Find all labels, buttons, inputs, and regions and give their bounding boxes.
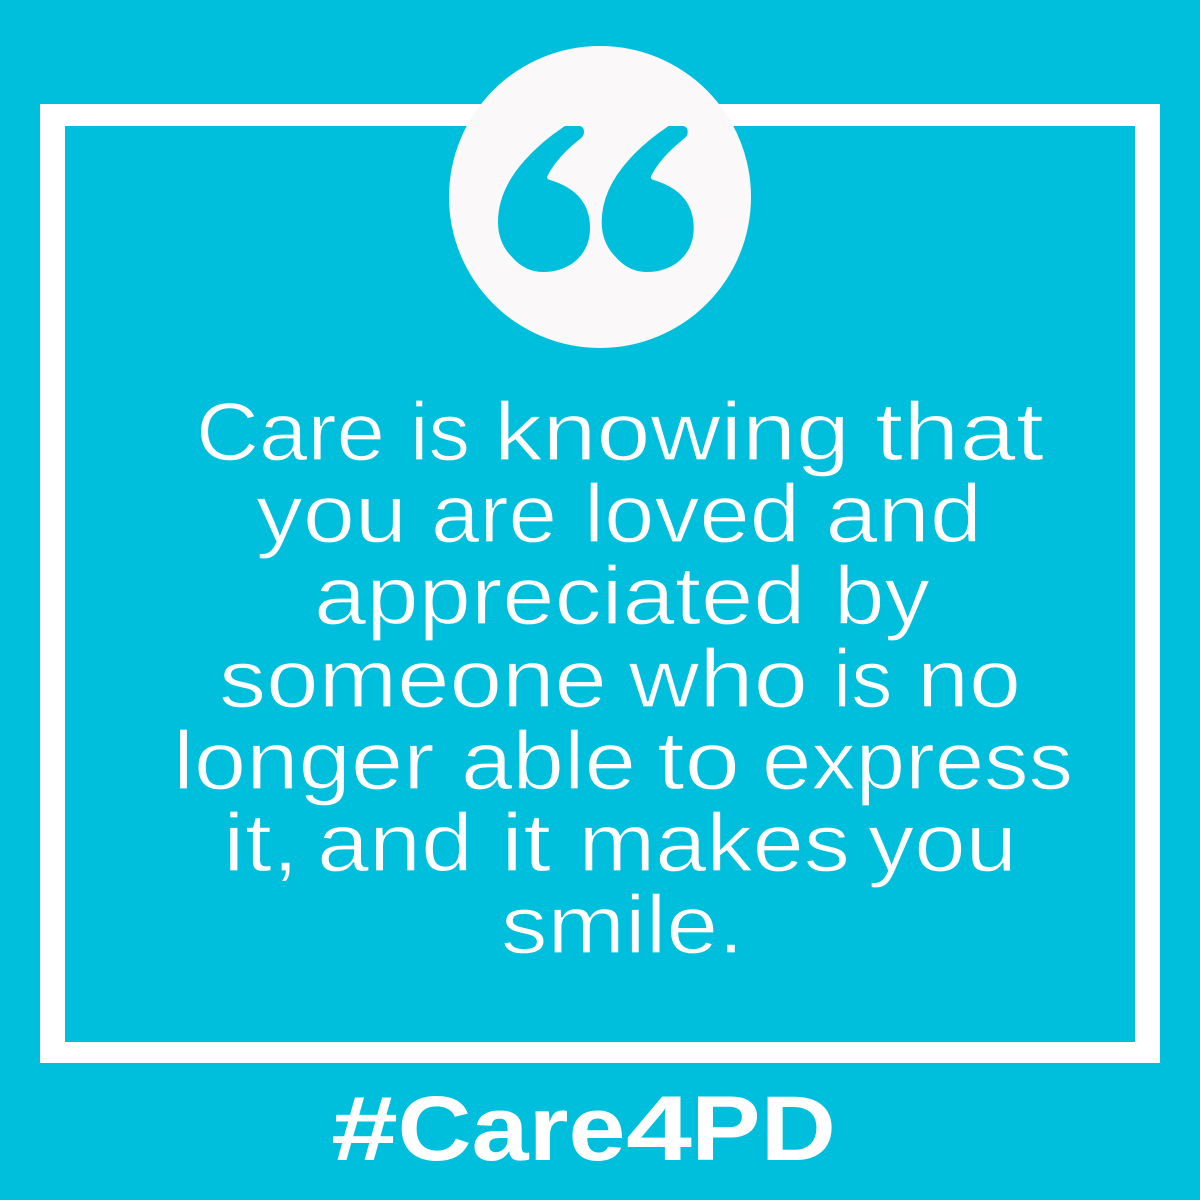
quote text: knowing [494, 385, 850, 478]
quote text: and [826, 467, 982, 560]
quote text: express [762, 714, 1073, 807]
quote text: you [256, 467, 407, 560]
quote text: and [317, 796, 473, 889]
quote text: longer [173, 714, 435, 807]
quote text: by [834, 549, 931, 642]
hashtag: PD [691, 1078, 836, 1180]
quote text: are [431, 467, 557, 560]
quote text: you [868, 796, 1017, 889]
hashtag: Care [398, 1078, 626, 1180]
quote text: is [833, 632, 892, 725]
quote text: to [657, 714, 740, 807]
quote text: Care [196, 385, 385, 478]
quote text: is [410, 385, 470, 478]
quote text: who [627, 632, 808, 725]
quote text: no [917, 632, 1021, 725]
quote text: it, [223, 796, 299, 889]
quote text: makes [578, 796, 850, 889]
quote text: smile. [501, 878, 744, 971]
hashtag: # [331, 1078, 398, 1180]
hashtag: 4 [626, 1078, 692, 1180]
hashtag [331, 1078, 836, 1180]
quote text: it [501, 796, 551, 889]
quote text: that [875, 385, 1044, 478]
white frame panel [40, 104, 1160, 1063]
icon: quotation mark badge [449, 46, 751, 348]
quote text: able [461, 714, 636, 807]
quote text: loved [584, 467, 800, 560]
quote text: appreciated [314, 549, 806, 642]
quote text: someone [219, 632, 607, 725]
quote text [173, 385, 1073, 971]
